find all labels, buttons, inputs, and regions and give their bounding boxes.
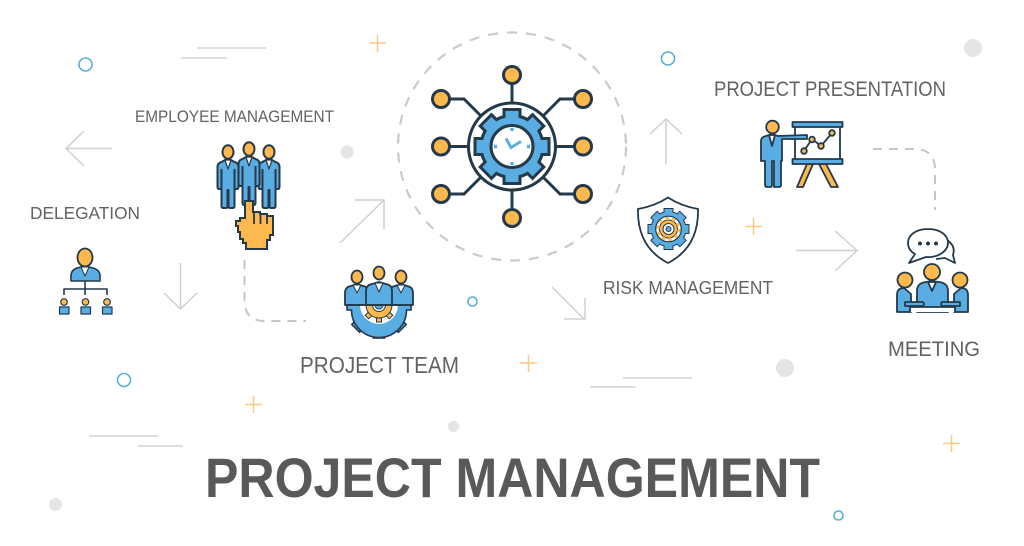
label: risk management: RISK MANAGEMENT: [603, 278, 773, 298]
label: employee management: EMPLOYEE MANAGEMENT: [135, 107, 334, 126]
icon: presenter and board: [761, 121, 842, 187]
label: delegation: DELEGATION: [30, 203, 140, 223]
arrow: left: [66, 131, 112, 166]
label: project team: PROJECT TEAM: [300, 352, 459, 378]
dashed connector: employee to team: [244, 260, 306, 321]
arrow: up: [650, 119, 682, 164]
title: PROJECT MANAGEMENT: [205, 446, 820, 509]
dashed circle around central icon: [398, 32, 626, 260]
arrows: [66, 119, 857, 320]
icon: meeting: [897, 229, 968, 312]
label: meeting: MEETING: [888, 337, 980, 361]
hand cursor: [236, 201, 273, 249]
icon: risk shield gear: [638, 198, 698, 263]
icon: delegation org chart: [60, 248, 112, 314]
arrow: down right: [552, 287, 585, 320]
arrow: up right: [340, 200, 384, 243]
arrow: right: [796, 231, 857, 271]
label: project presentation: PROJECT PRESENTATION: [714, 78, 946, 101]
arrow: down: [164, 263, 197, 309]
icon: employees and hand: [218, 142, 280, 249]
dashed connector: presentation to meeting: [873, 149, 935, 210]
icon: central gear clock network: [432, 66, 592, 226]
icon: project team: [345, 266, 413, 338]
